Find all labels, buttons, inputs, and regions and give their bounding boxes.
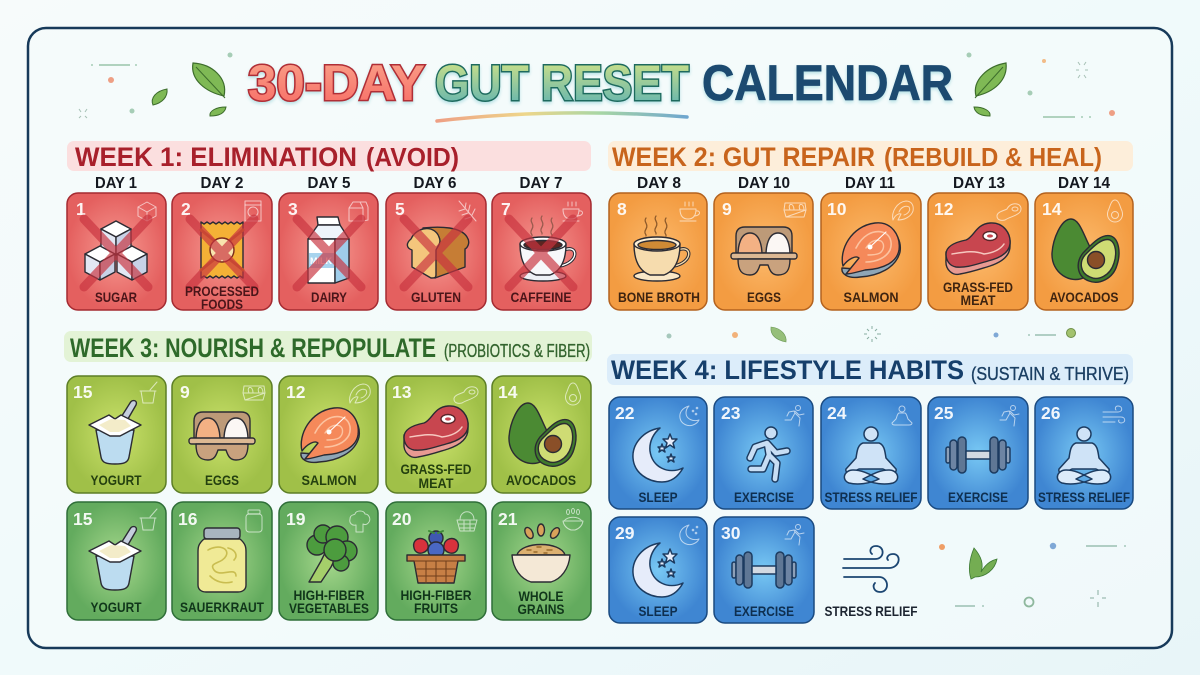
heading: week 4: WEEK 4: LIFESTYLE HABITS	[611, 355, 964, 385]
card: avocados row 1: 14	[498, 382, 518, 402]
card: exercise 25	[928, 397, 1028, 509]
card: high-fiber fruits: 20	[392, 509, 412, 529]
card: stress relief 24: STRESS RELIEF	[824, 489, 918, 505]
card: yogurt row 1: 15	[73, 382, 93, 402]
stress relief without card: STRESS RELIEF	[824, 603, 918, 619]
card: bone broth: 8	[617, 199, 627, 219]
card: exercise 30: EXERCISE	[734, 603, 794, 619]
day labels: DAY 5	[308, 175, 351, 192]
card: eggs row 1: 9	[180, 382, 190, 402]
card: dairy: 3	[288, 199, 298, 219]
card: eggs row 1	[172, 376, 272, 493]
card: dairy: DAIRY	[311, 289, 348, 305]
day labels: DAY 6	[414, 175, 457, 192]
day labels: DAY 7	[520, 175, 563, 192]
heading: week 3: WEEK 3: NOURISH & REPOPULATE	[70, 333, 436, 363]
card: caffeine: 7	[501, 199, 511, 219]
day labels: DAY 1	[95, 175, 137, 192]
card: high-fiber vegetables: 19	[286, 509, 306, 529]
card: processed foods	[172, 193, 272, 312]
card: exercise 23: EXERCISE	[734, 489, 794, 505]
card: whole grains: 21	[498, 509, 518, 529]
card: exercise 25: 25	[934, 403, 954, 423]
card: salmon: SALMON	[844, 289, 898, 305]
card: high-fiber vegetables: VEGETABLES	[289, 600, 369, 616]
card: sleep 22: SLEEP	[638, 489, 678, 505]
card: stress relief 26: STRESS RELIEF	[1038, 489, 1130, 505]
card: stress relief 24	[821, 397, 921, 509]
title underline	[437, 113, 687, 121]
card: whole grains: WHOLE	[518, 588, 564, 604]
title: GUT RESET	[435, 55, 689, 111]
card: grass-fed meat row 1: GRASS-FED	[400, 461, 472, 477]
card: processed foods: PROCESSED	[185, 283, 259, 299]
card: avocados: AVOCADOS	[1050, 289, 1118, 305]
card: bone broth	[609, 193, 707, 310]
card: sleep 29: SLEEP	[638, 603, 678, 619]
day labels: DAY 11	[845, 175, 895, 192]
card: exercise 23: 23	[721, 403, 741, 423]
card: whole grains: GRAINS	[518, 601, 564, 617]
card: grass-fed meat: MEAT	[960, 292, 996, 308]
title	[248, 55, 953, 111]
decoration: bottom right	[939, 543, 1126, 607]
card: sauerkraut: 16	[178, 509, 198, 529]
card: exercise 30: 30	[721, 523, 741, 543]
day labels: DAY 14	[1058, 175, 1110, 192]
card: sugar	[67, 193, 166, 310]
heading: week 2: (REBUILD & HEAL)	[884, 142, 1102, 172]
card: salmon: 10	[827, 199, 847, 219]
card: dairy	[279, 193, 378, 310]
card: eggs: 9	[722, 199, 732, 219]
card: sugar: SUGAR	[95, 289, 137, 305]
card: sleep 22: 22	[615, 403, 635, 423]
heading: week 1	[67, 141, 591, 172]
card: gluten: GLUTEN	[411, 289, 461, 305]
card: salmon row 1	[279, 376, 378, 493]
card: gluten	[386, 193, 486, 310]
card: high-fiber vegetables	[279, 502, 378, 620]
card: sleep 29	[609, 517, 707, 623]
card: eggs	[714, 193, 813, 310]
title: CALENDAR	[702, 55, 953, 111]
title decoration right	[966, 52, 1115, 118]
card: grass-fed meat row 1: MEAT	[418, 475, 454, 491]
card: processed foods: FOODS	[201, 296, 243, 312]
day labels	[637, 175, 1110, 192]
card: sleep 29: 29	[615, 523, 635, 543]
card: exercise 25: EXERCISE	[948, 489, 1008, 505]
panel: week 2	[608, 141, 1133, 310]
day labels: DAY 8	[637, 175, 681, 192]
card: eggs: EGGS	[747, 289, 781, 305]
card: sauerkraut: SAUERKRAUT	[180, 599, 264, 615]
card: high-fiber fruits: FRUITS	[414, 600, 458, 616]
decoration: centre row	[666, 326, 1076, 342]
card: grass-fed meat: 12	[934, 199, 954, 219]
heading: week 2: WEEK 2: GUT REPAIR	[612, 142, 875, 172]
card: high-fiber vegetables: HIGH-FIBER	[294, 587, 364, 603]
card: exercise 30	[714, 517, 814, 623]
card: salmon	[821, 193, 921, 310]
card: grass-fed meat row 1	[386, 376, 486, 493]
card: yogurt row 2: YOGURT	[90, 599, 142, 615]
card: avocados row 1: AVOCADOS	[506, 472, 576, 488]
card: stress relief 26: 26	[1041, 403, 1061, 423]
card: processed foods: 2	[181, 199, 191, 219]
card: avocados: 14	[1042, 199, 1062, 219]
panel: week 4	[607, 354, 1133, 623]
card: salmon row 1: 12	[286, 382, 306, 402]
day labels: DAY 13	[953, 175, 1005, 192]
card: avocados	[1035, 193, 1133, 310]
card: avocados row 1	[492, 376, 591, 493]
card: sleep 22	[609, 397, 707, 509]
stress relief without card	[824, 546, 918, 619]
card: stress relief 26	[1035, 397, 1133, 509]
heading: week 3: (PROBIOTICS & FIBER)	[444, 341, 590, 361]
card: eggs row 1: EGGS	[205, 472, 239, 488]
heading: week 4	[607, 354, 1133, 385]
heading: week 4: (SUSTAIN & THRIVE)	[971, 364, 1129, 384]
card: yogurt row 1: YOGURT	[90, 472, 142, 488]
card: salmon row 1: SALMON	[302, 472, 356, 488]
panel: week 3	[64, 331, 592, 620]
panel: week 1	[67, 141, 591, 312]
card: yogurt row 2: 15	[73, 509, 93, 529]
card: grass-fed meat row 1: 13	[392, 382, 412, 402]
card: bone broth: BONE BROTH	[618, 289, 700, 305]
card: yogurt row 2	[67, 502, 166, 620]
card: grass-fed meat	[928, 193, 1028, 310]
card: caffeine	[492, 193, 591, 310]
card: whole grains	[492, 502, 591, 620]
card: stress relief 24: 24	[827, 403, 847, 423]
card: yogurt row 1	[67, 376, 166, 493]
day labels	[95, 175, 563, 192]
card: high-fiber fruits: HIGH-FIBER	[400, 587, 472, 603]
heading: week 1: (AVOID)	[366, 142, 459, 172]
heading: week 1: WEEK 1: ELIMINATION	[75, 142, 357, 172]
title: 30-DAY	[248, 55, 425, 111]
day labels: DAY 10	[738, 175, 790, 192]
card: exercise 23	[714, 397, 813, 509]
title decoration left	[79, 52, 232, 118]
card: sugar: 1	[76, 199, 86, 219]
card: sauerkraut	[172, 502, 272, 620]
card: caffeine: CAFFEINE	[510, 289, 572, 305]
heading: week 2	[608, 141, 1133, 172]
card: high-fiber fruits	[386, 502, 486, 620]
day labels: DAY 2	[200, 175, 244, 192]
card: gluten: 5	[395, 199, 405, 219]
card: grass-fed meat: GRASS-FED	[943, 279, 1013, 295]
